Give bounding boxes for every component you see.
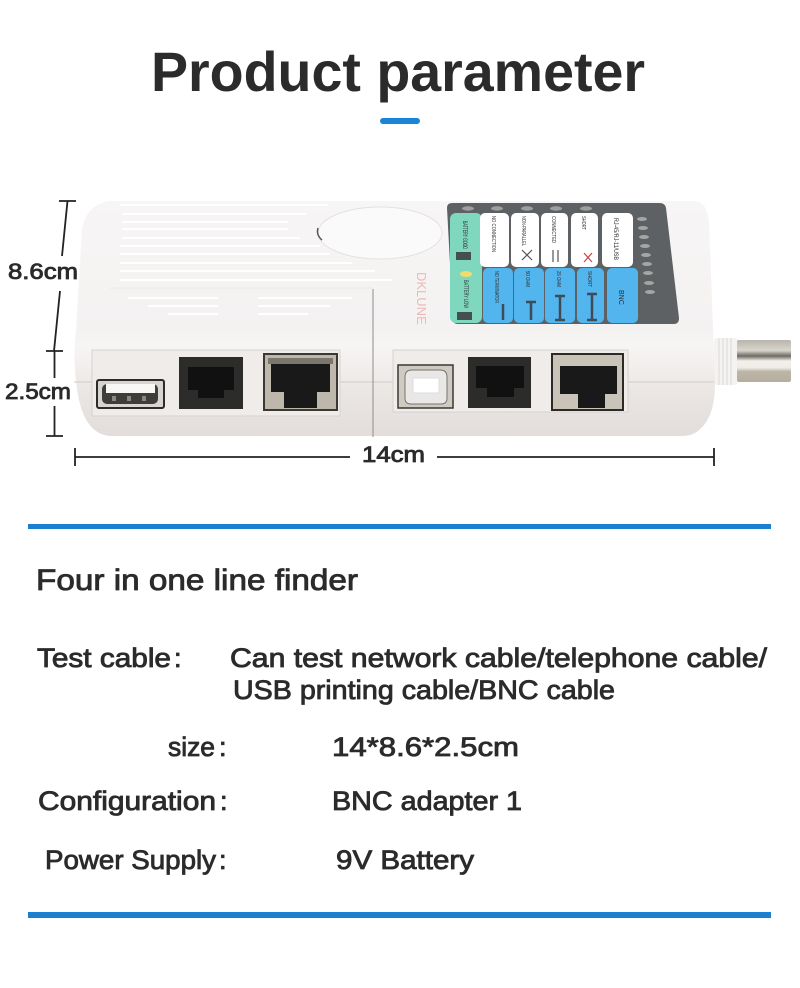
blue keys: SHORT [586,271,592,288]
brand logo: DKLUNE [414,272,429,325]
spec: test cable: USB printing cable/BNC cable [233,675,615,705]
device body [74,201,715,436]
white keys: SHORT [580,216,586,230]
left port panel [92,350,340,416]
top blue divider [28,524,771,529]
white keys: RJ-45/RJ-11/USB [612,218,619,260]
spec: configuration: BNC adapter 1 [332,786,522,816]
spec: size: : [219,732,227,762]
battery key [450,213,482,323]
top LEDs [462,206,592,211]
spec: test cable: Test cable [37,643,171,673]
spec: size: 14*8.6*2.5cm [332,732,519,762]
dimension: thickness 2.5cm: 2.5cm [5,379,71,404]
BNC connector [714,338,791,385]
blue keys [483,268,638,323]
spec: test cable: Can test network cable/telephone cable/ [230,643,768,673]
right LEDs [637,217,655,294]
spec: power supply: 9V Battery [336,845,475,875]
blue keys: 50 OHM [524,271,530,287]
vent lines [120,205,392,314]
battery key: BATTERY GOOD [461,221,467,249]
RJ11 port left [179,357,243,409]
dimension: length 14cm: 14cm [362,442,425,467]
spec: test cable [37,643,768,705]
subtitle: Four in one line finder [36,564,358,597]
vertical seam [372,289,374,437]
spec: size [168,732,519,762]
blue keys: 25 OHM [555,271,561,287]
spec: configuration [38,786,522,816]
dimension: thickness 2.5cm [5,351,71,436]
white keys: NO CONNECTION [490,216,496,252]
white keys: NON-PARALLEL [520,216,526,246]
spec: size: size [168,732,215,762]
spec: configuration: Configuration [38,786,216,816]
RJ45 port left [264,354,337,410]
blue keys: NO TERMINATOR [493,271,499,303]
bottom blue divider [28,912,771,918]
white keys: CONNECTED [550,216,556,243]
control panel [447,203,679,324]
spec: power supply: : [219,845,227,875]
white keys [480,213,633,267]
blue keys: BNC [617,290,624,305]
spec: test cable: : [174,643,182,673]
spec: power supply: Power Supply [45,845,217,875]
dimension: height 8.6cm: 8.6cm [8,259,78,284]
spec: configuration: : [220,786,228,816]
dimension: height 8.6cm [8,201,78,351]
dimension: length 14cm [75,442,714,467]
title: Product parameter [151,40,645,103]
USB B port [398,365,453,408]
right port panel [393,350,628,412]
USB A port [97,380,164,408]
body seams [74,381,714,383]
RJ45 port right [552,354,623,410]
spec: power supply [45,845,475,875]
RJ11 port right [468,357,531,408]
round button [318,207,442,259]
title accent bar [380,118,420,124]
battery key: BATTERY LOW [462,280,468,308]
product photo: line tester [74,201,791,437]
